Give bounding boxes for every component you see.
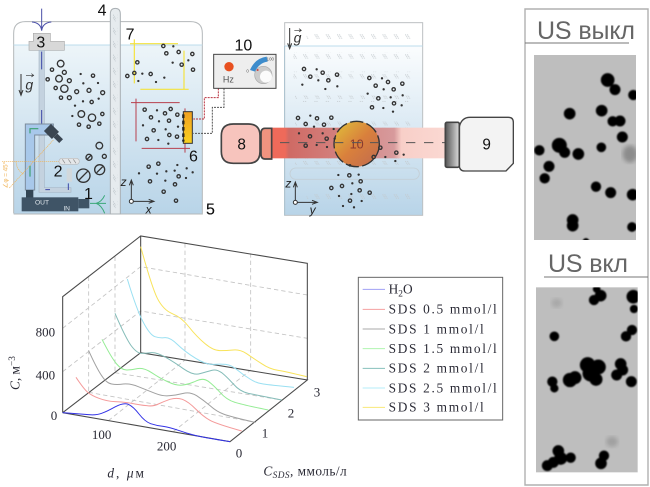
bubbles bottom right [147, 162, 180, 202]
series: red [76, 377, 242, 431]
axis label CSDS: C [263, 463, 273, 478]
numeric labels: 4 [98, 2, 107, 19]
tick labels: 100 [92, 427, 111, 442]
series: gray [89, 351, 255, 422]
tick labels: 0 [51, 408, 57, 423]
axis label C: C, м [7, 366, 22, 390]
tick labels: 800 [36, 325, 55, 340]
legend text: SDS 2 mmol/l [389, 361, 484, 376]
inlet nozzle 3 [29, 9, 64, 50]
legend text: SDS 1 mmol/l [389, 321, 484, 336]
legend text: O [403, 282, 413, 297]
camera [44, 124, 65, 145]
bubbles top right [126, 44, 195, 78]
series: blue [63, 404, 230, 442]
axis label CSDS: SDS [273, 471, 290, 481]
axes xz: z [120, 175, 127, 189]
legend text: SDS 3 mmol/l [389, 400, 484, 415]
bubbles middle right [143, 107, 179, 141]
laser 8 [221, 124, 272, 163]
axes zy: z [284, 176, 291, 190]
gravity vector: g [25, 76, 33, 92]
generator 10: 0 [246, 69, 249, 74]
tick labels: 3 [314, 385, 320, 400]
numeric labels: 1 [84, 186, 93, 203]
gravity vector [19, 74, 34, 95]
legend text [389, 282, 497, 415]
axis label d: d, μм [107, 465, 145, 480]
tick labels: 2 [288, 405, 294, 420]
numeric labels: 5 [206, 201, 215, 218]
tick labels: 400 [36, 368, 55, 383]
series: teal [115, 313, 282, 400]
panel: front-view tank schematic [206, 23, 513, 218]
focus zone: 10 [350, 137, 364, 151]
axis label C: −3 [8, 356, 18, 366]
large bubbles [77, 154, 105, 182]
dots left [71, 73, 100, 117]
pump 1: OUT [35, 199, 49, 206]
heading: US on: US вкл [548, 250, 628, 278]
camera 9: 9 [482, 136, 491, 153]
generator 10 [214, 38, 276, 88]
axes box [63, 236, 307, 442]
axes xz: x [145, 202, 153, 216]
legend lines [363, 289, 385, 407]
pump 1: IN [63, 205, 70, 212]
tube 4 [110, 8, 120, 214]
numeric labels: 2 [54, 164, 63, 181]
ultrasound beam [263, 128, 445, 158]
angle annotation [1, 140, 60, 188]
panel: photos frame [525, 9, 648, 485]
generator 10: 100 [267, 57, 274, 62]
focus zone [334, 121, 379, 167]
pump 1 [22, 190, 106, 213]
tick labels: 1 [262, 425, 268, 440]
camera 9 [445, 117, 513, 171]
wires [193, 88, 224, 133]
tick labels: 200 [157, 439, 176, 454]
tick labels: 0 [236, 445, 242, 460]
yellow frame 7 [130, 39, 189, 89]
pipe [39, 50, 71, 192]
series: yellow [141, 247, 307, 377]
blue channel [25, 124, 53, 190]
bubbles [296, 67, 404, 202]
numeric labels: 7 [126, 26, 135, 43]
numeric labels: 6 [189, 149, 198, 166]
legend text: SDS 2.5 mmol/l [389, 380, 497, 395]
dots middle right [142, 109, 179, 145]
photo: US on [536, 286, 639, 472]
grid [63, 243, 307, 432]
rods [290, 33, 419, 200]
axis label CSDS: , ммоль/л [290, 463, 347, 478]
axes zy: y [309, 203, 317, 217]
tank [14, 22, 202, 214]
legend text: H [389, 282, 398, 297]
tick labels [36, 325, 320, 460]
heading: US off: US выкл [537, 17, 635, 45]
angle annotation: ∠φ = 45° [1, 161, 9, 188]
panel: side-view tank schematic [1, 2, 224, 218]
laser 8: 8 [237, 136, 246, 153]
gravity vector [288, 28, 302, 49]
legend text: 2 [398, 289, 403, 299]
photo: US off [534, 55, 638, 244]
dots top right [137, 45, 189, 83]
tank [285, 23, 423, 215]
series: green [102, 339, 268, 410]
dots [298, 68, 405, 208]
numeric labels [36, 2, 215, 218]
numeric labels: 3 [36, 35, 45, 52]
legend text: SDS 0.5 mmol/l [389, 301, 497, 316]
bubbles left [46, 60, 106, 158]
legend [358, 277, 503, 420]
axes xz [120, 175, 154, 216]
axes zy [284, 176, 317, 217]
chart: 3D size distribution [7, 236, 347, 481]
dots bottom right [138, 164, 194, 182]
transducer 2 [59, 158, 79, 182]
gravity vector: g [294, 30, 302, 46]
series: cyan [127, 279, 294, 387]
generator 10: 10 [234, 38, 252, 55]
legend text: SDS 1.5 mmol/l [389, 341, 497, 356]
red frame [131, 99, 190, 153]
generator 10: Hz [223, 75, 234, 85]
optical axis [280, 141, 445, 144]
transducer 6 [183, 112, 192, 143]
label 5: 5 [206, 201, 215, 218]
